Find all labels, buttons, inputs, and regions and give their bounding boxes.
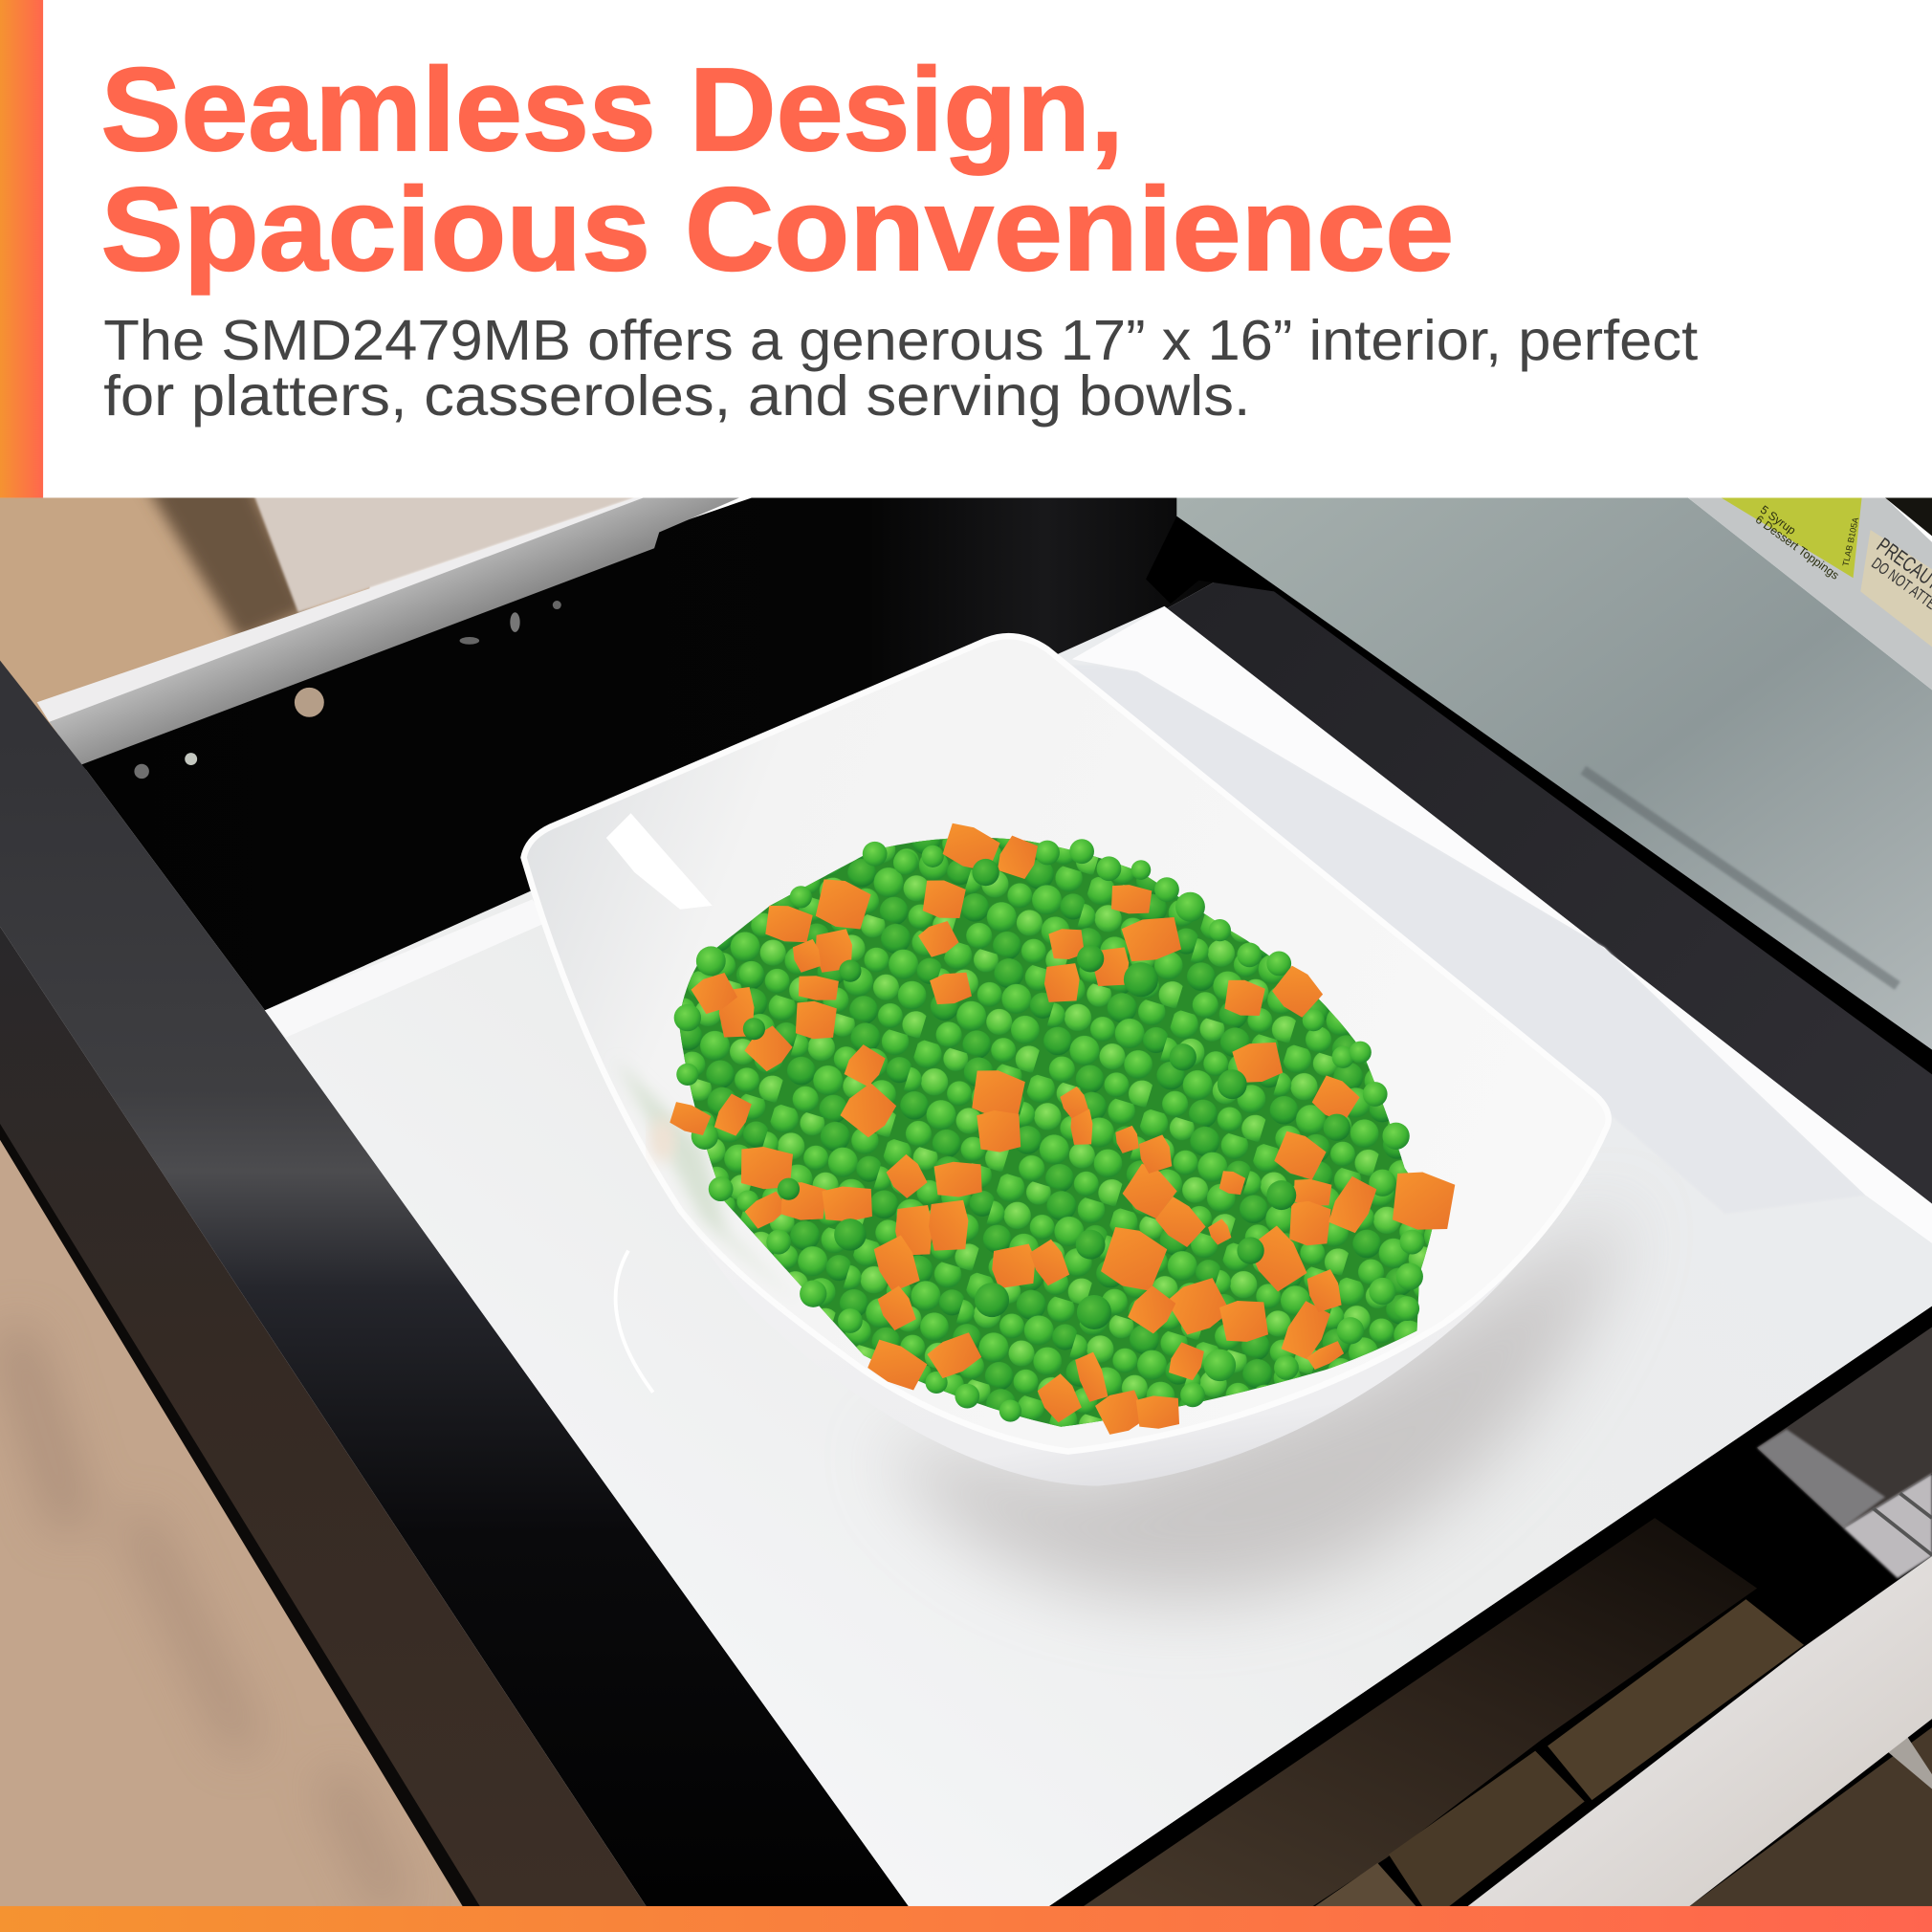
yellow label <box>1722 497 1862 582</box>
title: Seamless Design, <box>101 44 1124 176</box>
carrot pieces <box>668 821 1456 1439</box>
serving bowl <box>524 636 1609 1486</box>
brown panel middle <box>1548 1599 1804 1800</box>
bowl outer body <box>680 1128 1607 1486</box>
cavity trim strip <box>1688 497 1932 690</box>
brown panel lower <box>1389 1751 1585 1907</box>
wood grain streaks <box>12 1330 394 1910</box>
dark hardware right <box>1757 1327 1932 1527</box>
dark wood streak behind drawer <box>136 469 308 641</box>
dark band between cavity and tray <box>1164 516 1932 1214</box>
white tray <box>265 606 1932 1907</box>
yellow label: TLAB B105A <box>1841 516 1860 567</box>
orange side bar <box>0 0 43 497</box>
peas texture <box>679 838 1436 1427</box>
yellow label: 5 Syrup <box>1758 503 1798 538</box>
description text <box>103 308 1699 428</box>
drawer front frame, upper face <box>0 661 910 1907</box>
title: Spacious Convenience <box>101 164 1454 296</box>
tray rim, back left <box>265 899 548 1038</box>
drawer side rail: white edge <box>37 497 659 722</box>
drawer side rail: metal face <box>50 497 739 765</box>
below tray base <box>1047 1306 1932 1907</box>
top right dark corner <box>1885 497 1932 536</box>
tray inner band <box>1060 666 1865 1214</box>
bowl glare <box>606 813 713 910</box>
black line along cavity <box>1146 516 1932 1074</box>
wood floor lower left <box>0 1085 517 1922</box>
precaution label <box>1860 530 1932 647</box>
description text: The SMD2479MB offers a generous 17” x 16” interior, perfect <box>103 308 1699 372</box>
peas on top of carrots <box>743 859 1350 1329</box>
wood floor upper left <box>0 444 369 739</box>
rail screws <box>134 601 561 779</box>
bowl shadow on tray <box>888 1207 1627 1599</box>
bowl rim and interior <box>524 636 1609 1452</box>
oven printed marking <box>1583 770 1898 986</box>
frame thin black edge <box>0 1124 480 1907</box>
yellow label: 6 Dessert Toppings <box>1753 513 1841 582</box>
drawer interior back wall <box>50 497 1219 1010</box>
white stacked rails <box>1843 1474 1932 1578</box>
header panel <box>0 0 1932 497</box>
blurred white object behind drawer <box>244 469 641 612</box>
brown panel upper <box>1082 1518 1757 1907</box>
peas mass <box>679 838 1436 1427</box>
drawer front frame, lower face <box>0 927 647 1907</box>
tray rim, back right <box>1072 606 1932 1243</box>
bottom gradient bar <box>0 1906 1932 1932</box>
description text: for platters, casseroles, and serving bowls. <box>103 363 1251 428</box>
tray reflection <box>616 1251 653 1393</box>
title <box>101 44 1454 296</box>
thin trim far right <box>1885 1731 1932 1789</box>
perimeter peas <box>674 839 1424 1422</box>
photo: open warming drawer with bowl of peas and carrots <box>0 444 1932 1922</box>
brown panel bottom <box>1313 1863 1417 1907</box>
white drawer front strip <box>1466 1556 1932 1907</box>
silver blurred edge <box>1757 1429 1885 1527</box>
bowl peach reflection <box>650 1117 675 1162</box>
oven cavity <box>1176 497 1932 1050</box>
brown panel far right <box>1688 1727 1932 1907</box>
bowl interior reflection <box>616 1060 801 1306</box>
